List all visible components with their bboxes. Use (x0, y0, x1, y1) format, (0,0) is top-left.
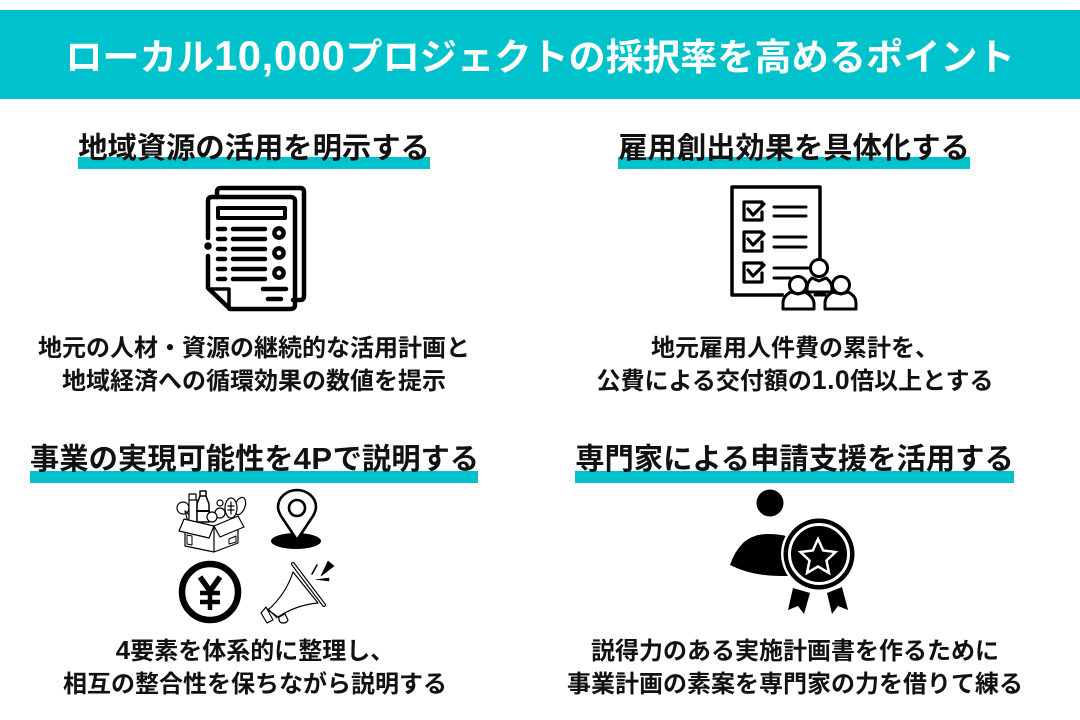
text: job creation: 地元雇用人件費の累計を、 (651, 335, 939, 362)
icon: megaphone (261, 561, 334, 623)
icon: product box (177, 491, 248, 552)
icon: documents (206, 188, 304, 309)
title banner (0, 10, 1080, 99)
text: feasibility 4P (63, 635, 447, 698)
heading: job creation: 雇用創出効果を具体化する (618, 132, 970, 165)
text: job creation (597, 335, 993, 395)
icon: checklist with people (732, 187, 856, 309)
text: local resources (38, 335, 470, 395)
text: feasibility 4P: 相互の整合性を保ちながら説明する (63, 671, 447, 698)
icon: expert with medal (730, 490, 857, 614)
icon: yen coin (182, 564, 238, 620)
text: feasibility 4P: 4要素を体系的に整理し、 (116, 635, 394, 665)
title banner: ローカル10,000プロジェクトの採択率を高めるポイント (65, 32, 1015, 79)
text: local resources: 地域経済への循環効果の数値を提示 (62, 368, 446, 395)
text: expert support: 事業計画の素案を専門家の力を借りて練る (567, 671, 1023, 698)
text: expert support: 説得力のある実施計画書を作るために (591, 638, 999, 665)
text: local resources: 地元の人材・資源の継続的な活用計画と (38, 335, 470, 362)
icon: map pin (271, 490, 321, 549)
heading: expert support: 専門家による申請支援を活用する (575, 443, 1014, 476)
heading: local resources: 地域資源の活用を明示する (78, 132, 430, 165)
text: expert support (567, 638, 1023, 698)
text: job creation: 公費による交付額の1.0倍以上とする (597, 365, 993, 395)
heading: feasibility 4P: 事業の実現可能性を4Pで説明する (30, 441, 479, 476)
